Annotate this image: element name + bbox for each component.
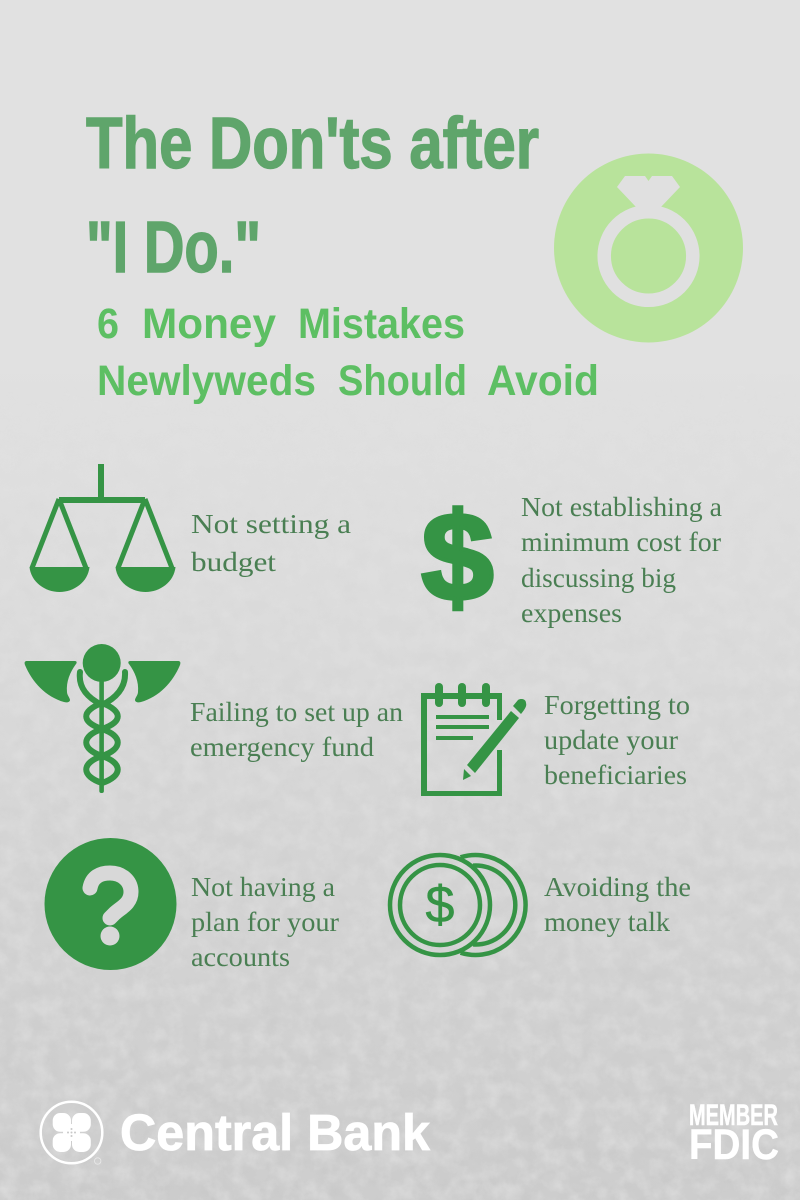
text: minimum cost: discussing big bbox=[521, 563, 676, 593]
icon: coins bbox=[390, 855, 526, 955]
background bbox=[0, 739, 800, 1200]
title: "I Do." bbox=[86, 208, 261, 288]
text: money talk: money talk bbox=[544, 907, 671, 937]
icon: coins: $ bbox=[426, 876, 454, 934]
text: not setting a budget: budget bbox=[191, 547, 277, 577]
text: not setting a budget: Not setting a bbox=[191, 509, 351, 539]
text: plan for accounts: Not having a bbox=[191, 872, 335, 902]
text: minimum cost: minimum cost for bbox=[521, 527, 721, 557]
text: update beneficiaries: update your bbox=[544, 725, 678, 755]
text: update beneficiaries: beneficiaries bbox=[544, 760, 687, 790]
title bbox=[86, 104, 539, 288]
logo: central bank emblem bbox=[41, 1102, 102, 1164]
subtitle bbox=[97, 300, 599, 405]
text: money talk bbox=[544, 872, 691, 937]
icon: balance scales bbox=[30, 464, 176, 592]
subtitle: Mistakes bbox=[298, 300, 465, 348]
text: update beneficiaries: Forgetting to bbox=[544, 690, 690, 720]
icon: wedding ring bbox=[554, 154, 743, 342]
icon: dollar sign: $ bbox=[422, 488, 494, 627]
logo: central bank wordmark: Central Bank bbox=[120, 1104, 431, 1161]
text: emergency fund: Failing to set up an bbox=[190, 697, 404, 727]
subtitle: Should bbox=[338, 357, 467, 405]
subtitle: Newlyweds bbox=[97, 357, 316, 405]
icon: caduceus bbox=[25, 644, 180, 793]
text: update beneficiaries bbox=[544, 690, 690, 790]
text: minimum cost bbox=[521, 492, 722, 628]
logo: member fdic: FDIC bbox=[689, 1121, 779, 1169]
subtitle: Money bbox=[142, 300, 276, 348]
text: minimum cost: Not establishing a bbox=[521, 492, 722, 522]
text: money talk: Avoiding the bbox=[544, 872, 691, 902]
text: emergency fund: emergency fund bbox=[190, 732, 375, 762]
subtitle: Avoid bbox=[487, 357, 599, 405]
logo: member fdic bbox=[689, 1099, 779, 1169]
icon: question mark bbox=[44, 838, 176, 970]
text: not setting a budget bbox=[191, 509, 351, 577]
text: plan for accounts: accounts bbox=[191, 942, 290, 972]
text: minimum cost: expenses bbox=[521, 598, 622, 628]
title: The Don'ts after bbox=[86, 104, 539, 184]
icon: notepad and pencil bbox=[421, 683, 526, 796]
text: plan for accounts bbox=[191, 872, 339, 972]
text: plan for accounts: plan for your bbox=[191, 907, 339, 937]
subtitle: 6 bbox=[97, 300, 119, 348]
text: emergency fund bbox=[190, 697, 404, 762]
